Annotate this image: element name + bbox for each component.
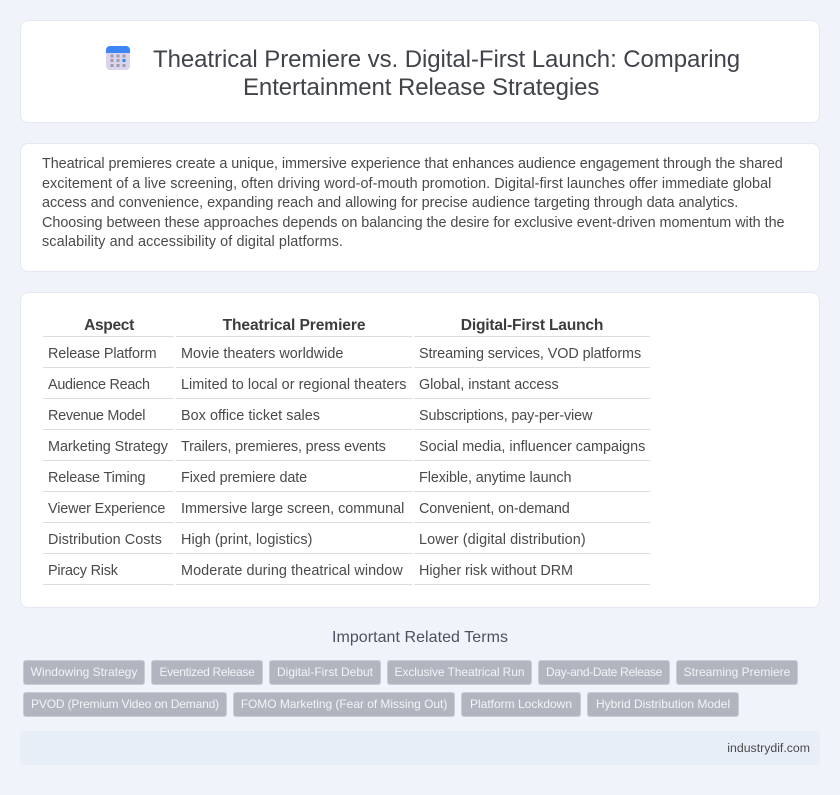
title bbox=[153, 46, 740, 101]
heading: related terms: Important Related Terms bbox=[332, 629, 508, 646]
table rows: High (print, logistics) bbox=[181, 532, 313, 548]
table rows bbox=[43, 336, 650, 585]
title: Entertainment Release Strategies bbox=[243, 74, 599, 101]
table rows: Fixed premiere date bbox=[181, 470, 307, 486]
table rows: Trailers, premieres, press events bbox=[181, 439, 386, 455]
table rows: Global, instant access bbox=[419, 377, 559, 393]
table rows: Piracy Risk bbox=[48, 563, 118, 579]
text block: introduction: scalability and accessibility of digital platforms. bbox=[42, 234, 343, 250]
table rows: Viewer Experience bbox=[48, 501, 165, 517]
table rows: Convenient, on-demand bbox=[419, 501, 570, 517]
footer source: industrydif.com bbox=[727, 741, 810, 755]
title: Theatrical Premiere vs. Digital-First Launch: Comparing bbox=[153, 46, 740, 73]
table rows: Release Platform bbox=[48, 346, 156, 362]
icon: calendar bbox=[106, 46, 130, 70]
related terms tags bbox=[23, 660, 798, 717]
text block: introduction: Theatrical premieres create a unique, immersive experience that enhances audience engagement through the shared bbox=[42, 156, 783, 172]
related terms tags: Hybrid Distribution Model bbox=[596, 697, 730, 711]
table rows: Subscriptions, pay-per-view bbox=[419, 408, 592, 424]
table rows: Distribution Costs bbox=[48, 532, 162, 548]
related terms tags: Streaming Premiere bbox=[684, 665, 790, 679]
table rows: Movie theaters worldwide bbox=[181, 346, 343, 362]
table header: Theatrical Premiere bbox=[223, 317, 365, 334]
table rows: Limited to local or regional theaters bbox=[181, 377, 406, 393]
related terms tags: PVOD (Premium Video on Demand) bbox=[31, 697, 219, 711]
table rows: Box office ticket sales bbox=[181, 408, 320, 424]
text block: introduction bbox=[42, 156, 785, 250]
related terms tags: Eventized Release bbox=[160, 665, 254, 679]
footer bbox=[20, 731, 820, 765]
panel: comparison table bbox=[20, 292, 820, 608]
text block: introduction: excitement of a live screening, often driving word-of-mouth promotion. Digital-first launches offer immediate global bbox=[42, 176, 771, 192]
related terms tags: Exclusive Theatrical Run bbox=[395, 665, 524, 679]
table rows: Higher risk without DRM bbox=[419, 563, 573, 579]
table rows: Social media, influencer campaigns bbox=[419, 439, 645, 455]
panel: introduction bbox=[20, 143, 820, 272]
table rows: Marketing Strategy bbox=[48, 439, 168, 455]
table rows: Revenue Model bbox=[48, 408, 145, 424]
related terms tags: Digital-First Debut bbox=[277, 665, 373, 679]
table rows: Audience Reach bbox=[48, 377, 150, 393]
related terms tags: Day-and-Date Release bbox=[546, 665, 662, 679]
text block: introduction: access and convenience, expanding reach and allowing for precise audience targeting through data analytics. bbox=[42, 195, 738, 211]
table header: Aspect bbox=[84, 317, 134, 334]
table rows: Release Timing bbox=[48, 470, 145, 486]
table header bbox=[84, 317, 603, 334]
table rows: Flexible, anytime launch bbox=[419, 470, 571, 486]
table rows: Immersive large screen, communal bbox=[181, 501, 404, 517]
table rows: Lower (digital distribution) bbox=[419, 532, 586, 548]
table header: Digital-First Launch bbox=[461, 317, 603, 334]
related terms tags: Platform Lockdown bbox=[470, 697, 572, 711]
header panel bbox=[20, 20, 820, 123]
table rows: Moderate during theatrical window bbox=[181, 563, 403, 579]
related terms tags: Windowing Strategy bbox=[31, 665, 137, 679]
table rows: Streaming services, VOD platforms bbox=[419, 346, 641, 362]
related terms tags: FOMO Marketing (Fear of Missing Out) bbox=[241, 697, 447, 711]
text block: introduction: Choosing between these approaches depends on balancing the desire for exclusive event-driven momentum with the bbox=[42, 214, 785, 230]
